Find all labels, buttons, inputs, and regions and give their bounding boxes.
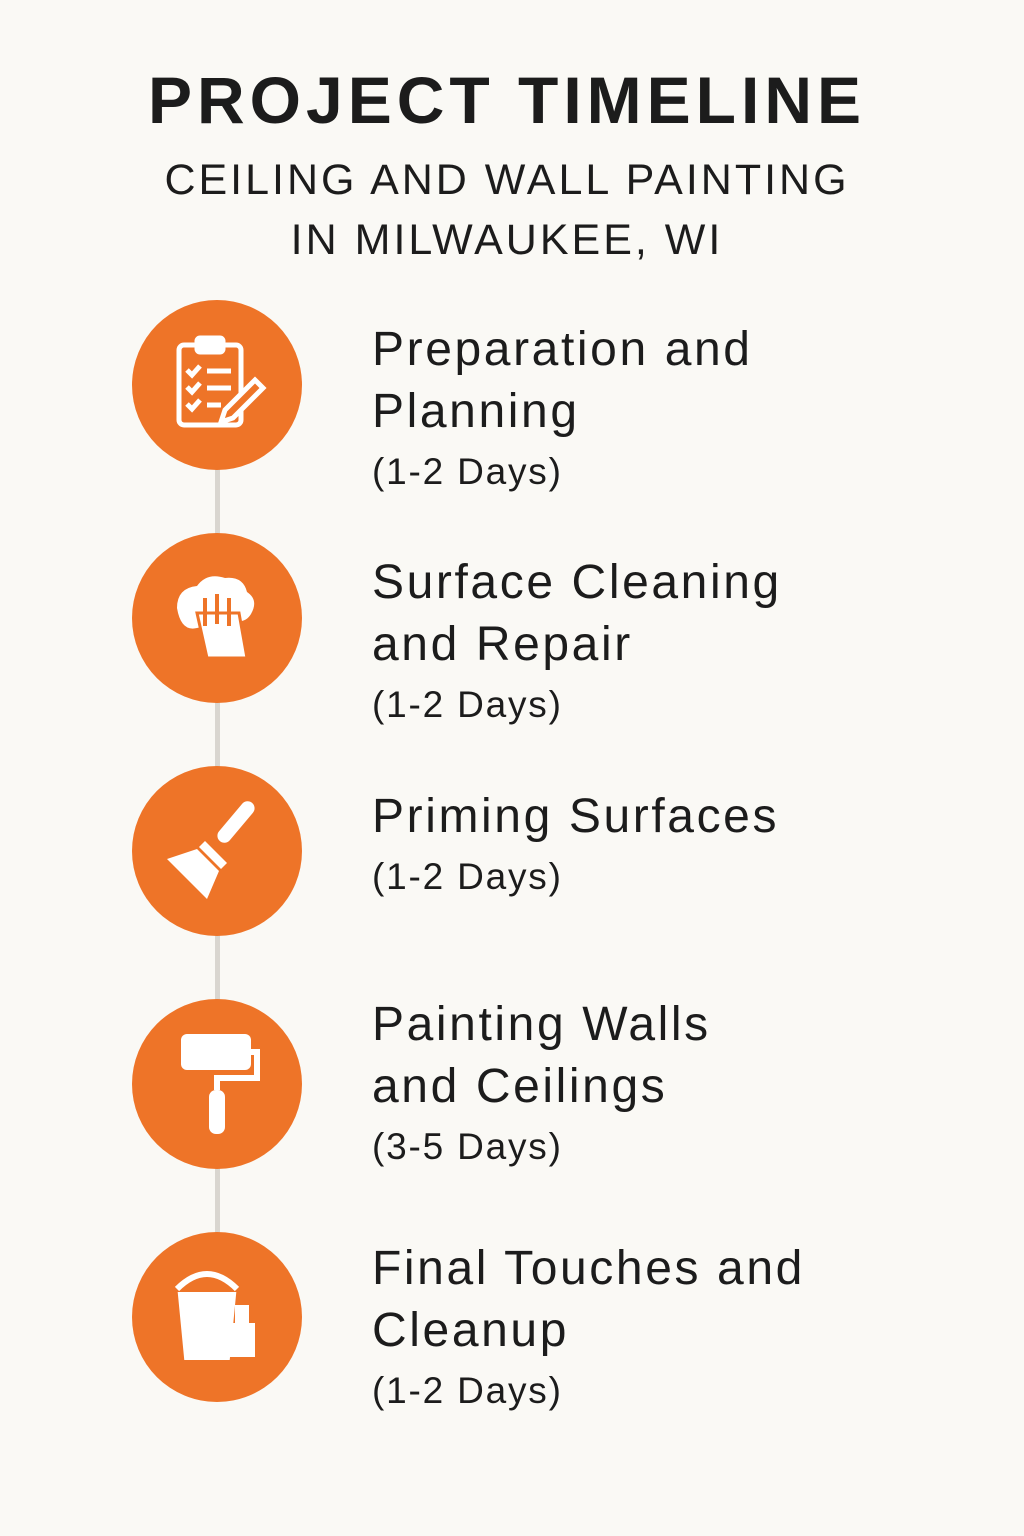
step 3 text: (1-2 Days) <box>372 856 563 897</box>
step 4 text: (3-5 Days) <box>372 1126 563 1167</box>
step 5 text: Cleanup <box>372 1304 569 1357</box>
step 4 text <box>372 998 711 1167</box>
timeline connector <box>215 384 220 1316</box>
subtitle: CEILING AND WALL PAINTING <box>164 156 850 204</box>
title: PROJECT TIMELINE <box>148 63 866 137</box>
step 4 icon: roller <box>132 999 302 1169</box>
step 2 text: and Repair <box>372 618 633 671</box>
step 1 icon: clipboard <box>132 300 302 470</box>
step 5 icon: bucket <box>132 1232 302 1402</box>
subtitle <box>164 156 850 264</box>
step 4 text: Painting Walls <box>372 998 711 1051</box>
step 3 text <box>372 790 779 897</box>
step 2 text <box>372 556 782 725</box>
step 3 icon: brush <box>132 766 302 936</box>
step 1 text: Preparation and <box>372 323 753 376</box>
step 2 text: Surface Cleaning <box>372 556 782 609</box>
step 1 text: Planning <box>372 385 580 438</box>
step 5 text: Final Touches and <box>372 1242 805 1295</box>
step 5 text <box>372 1242 805 1411</box>
subtitle: IN MILWAUKEE, WI <box>291 216 723 264</box>
step 1 text <box>372 323 753 492</box>
step 3 text: Priming Surfaces <box>372 790 779 843</box>
step 5 text: (1-2 Days) <box>372 1370 563 1411</box>
step 2 text: (1-2 Days) <box>372 684 563 725</box>
step 4 text: and Ceilings <box>372 1060 667 1113</box>
step 2 icon: cleaning hand <box>132 533 302 703</box>
step 1 text: (1-2 Days) <box>372 451 563 492</box>
